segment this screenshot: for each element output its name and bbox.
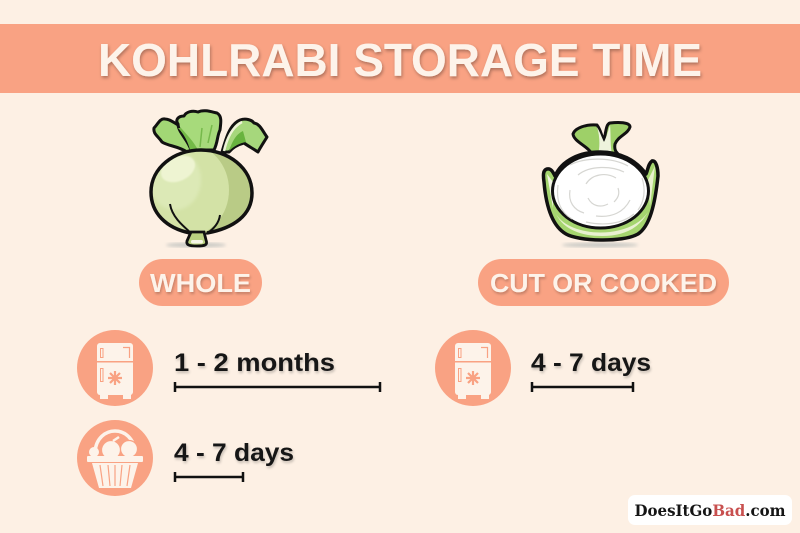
duration: whole, freezer: 1 - 2 months (174, 349, 335, 377)
label pill: whole: WHOLE (150, 268, 251, 298)
watermark badge: DoesItGoBad.com (634, 501, 786, 520)
illustration: whole kohlrabi (147, 111, 267, 248)
icon: fridge, whole (77, 330, 153, 406)
flesh (552, 154, 648, 228)
label pill: cut or cooked: CUT OR COOKED (490, 268, 717, 298)
illustration: cut kohlrabi (543, 122, 658, 248)
icon: fridge, cut (435, 330, 511, 406)
duration: cut, freezer (531, 349, 651, 392)
stems (573, 122, 630, 155)
icon: basket (77, 420, 153, 496)
bulb (152, 152, 250, 233)
left leaf (154, 119, 192, 152)
duration: cut, freezer: 4 - 7 days (531, 349, 651, 377)
right leaf (222, 119, 267, 152)
duration: whole, pantry: 4 - 7 days (174, 439, 294, 467)
label pill: whole (139, 259, 262, 306)
label pill: cut or cooked (478, 259, 729, 306)
watermark badge (628, 495, 792, 525)
body and rim (543, 152, 658, 240)
title: KOHLRABI STORAGE TIME (98, 34, 702, 86)
duration: whole, freezer (174, 349, 380, 392)
duration: whole, pantry (174, 439, 294, 482)
title banner (0, 24, 800, 93)
centre leaf (177, 111, 221, 150)
